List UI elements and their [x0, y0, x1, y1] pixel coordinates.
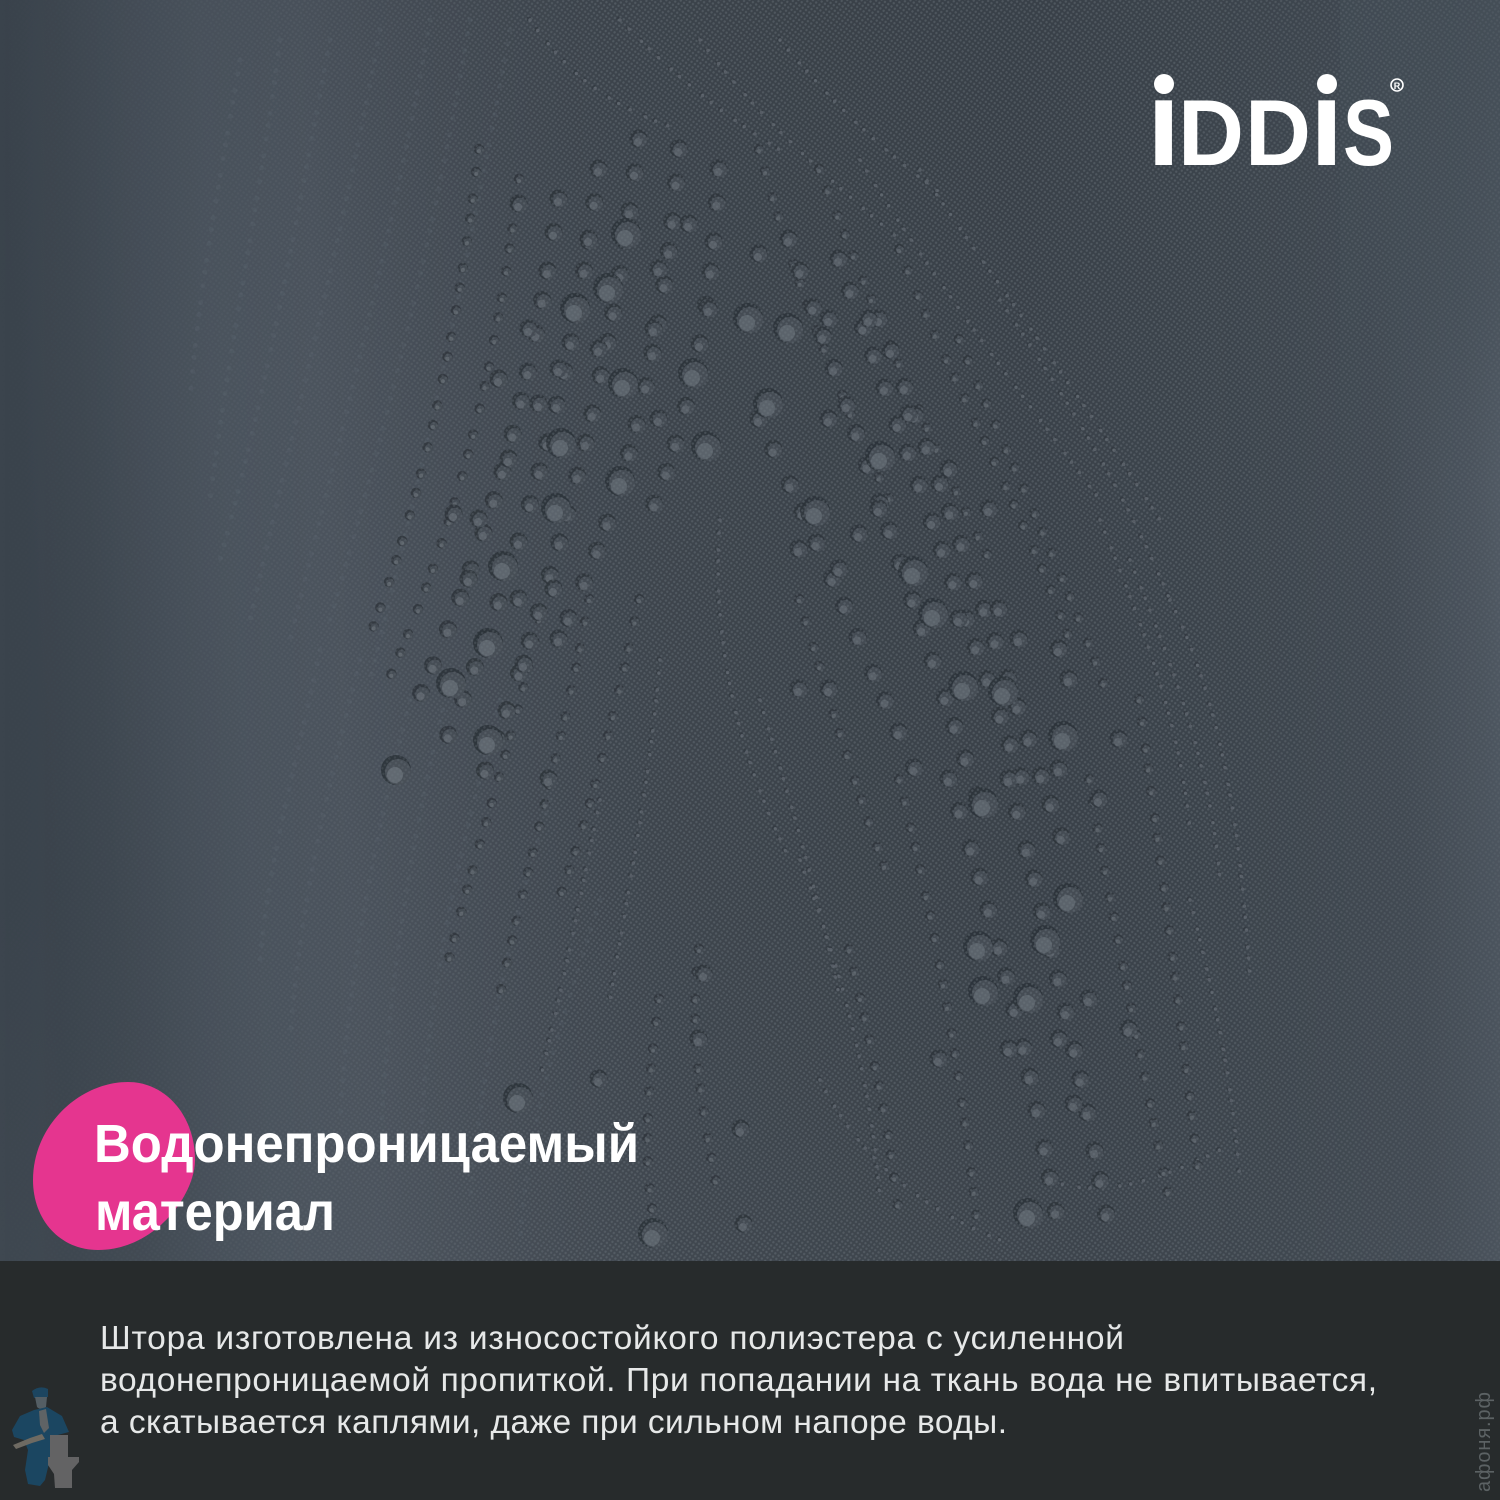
iDDiS logo: I	[1148, 80, 1180, 185]
iDDiS logo: I	[1311, 80, 1343, 185]
icon: plumber with toilet	[12, 1387, 79, 1488]
watermark: афоня.рф	[1473, 1392, 1495, 1492]
water droplets on fabric	[190, 19, 1250, 1251]
body text: водонепроницаемой пропиткой. При попадании на ткань вода не впитывается,	[100, 1362, 1377, 1399]
heading: Водонепроницаемый	[94, 1114, 639, 1174]
pink blob accent	[33, 1082, 195, 1250]
body text: Штора изготовлена из износостойкого полиэстера с усиленной	[100, 1320, 1124, 1357]
body text: а скатывается каплями, даже при сильном напоре воды.	[100, 1404, 1007, 1441]
heading	[94, 1114, 639, 1242]
dark footer band	[0, 1261, 1500, 1500]
iDDiS logo: R	[1394, 81, 1401, 91]
iDDiS logo: D	[1245, 80, 1311, 185]
body text	[100, 1320, 1377, 1441]
fabric weave texture	[368, 0, 1419, 1261]
iDDiS logo: S	[1343, 80, 1394, 185]
heading: материал	[95, 1182, 335, 1242]
iDDiS logo	[1148, 74, 1403, 185]
iDDiS logo: D	[1178, 80, 1244, 185]
